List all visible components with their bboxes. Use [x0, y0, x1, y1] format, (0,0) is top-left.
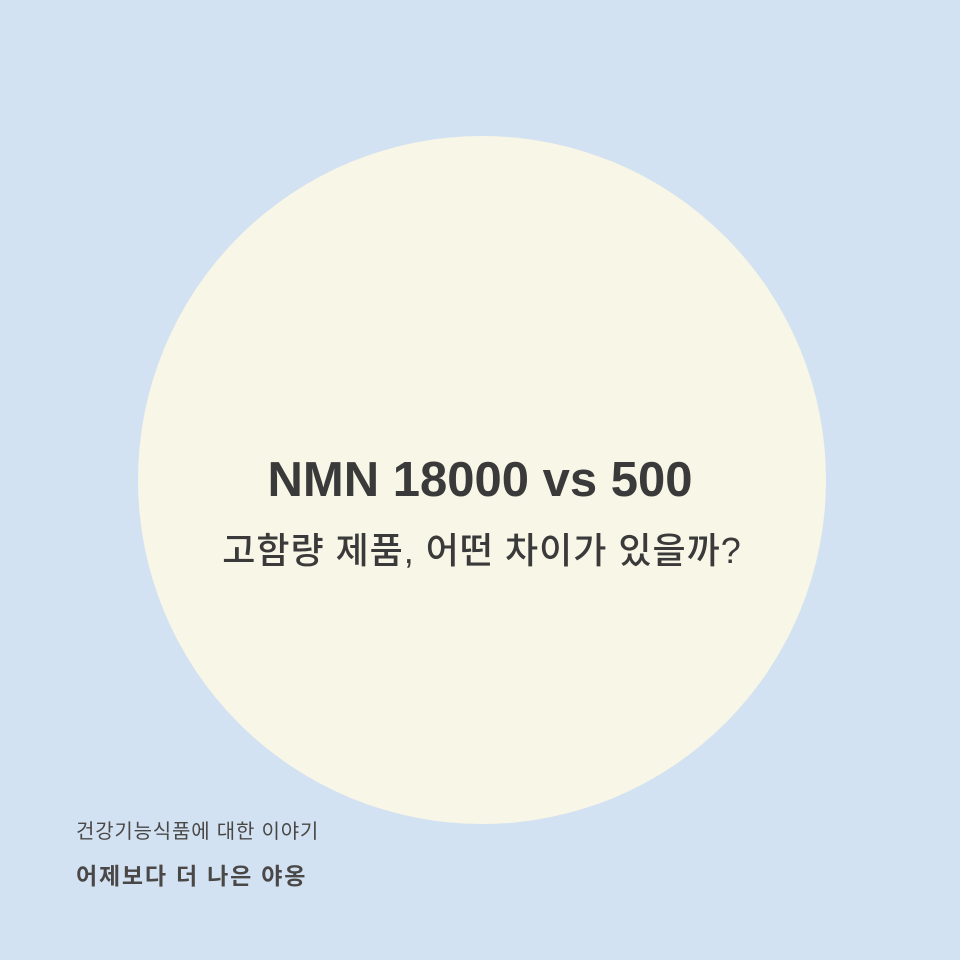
footer caption: 건강기능식품에 대한 이야기	[76, 821, 319, 843]
subtitle: 고함량 제품, 어떤 차이가 있을까?	[222, 530, 742, 571]
footer brand: 어제보다 더 나은 야옹	[76, 863, 307, 889]
circle background	[138, 136, 826, 824]
title: NMN 18000 vs 500	[268, 453, 692, 507]
